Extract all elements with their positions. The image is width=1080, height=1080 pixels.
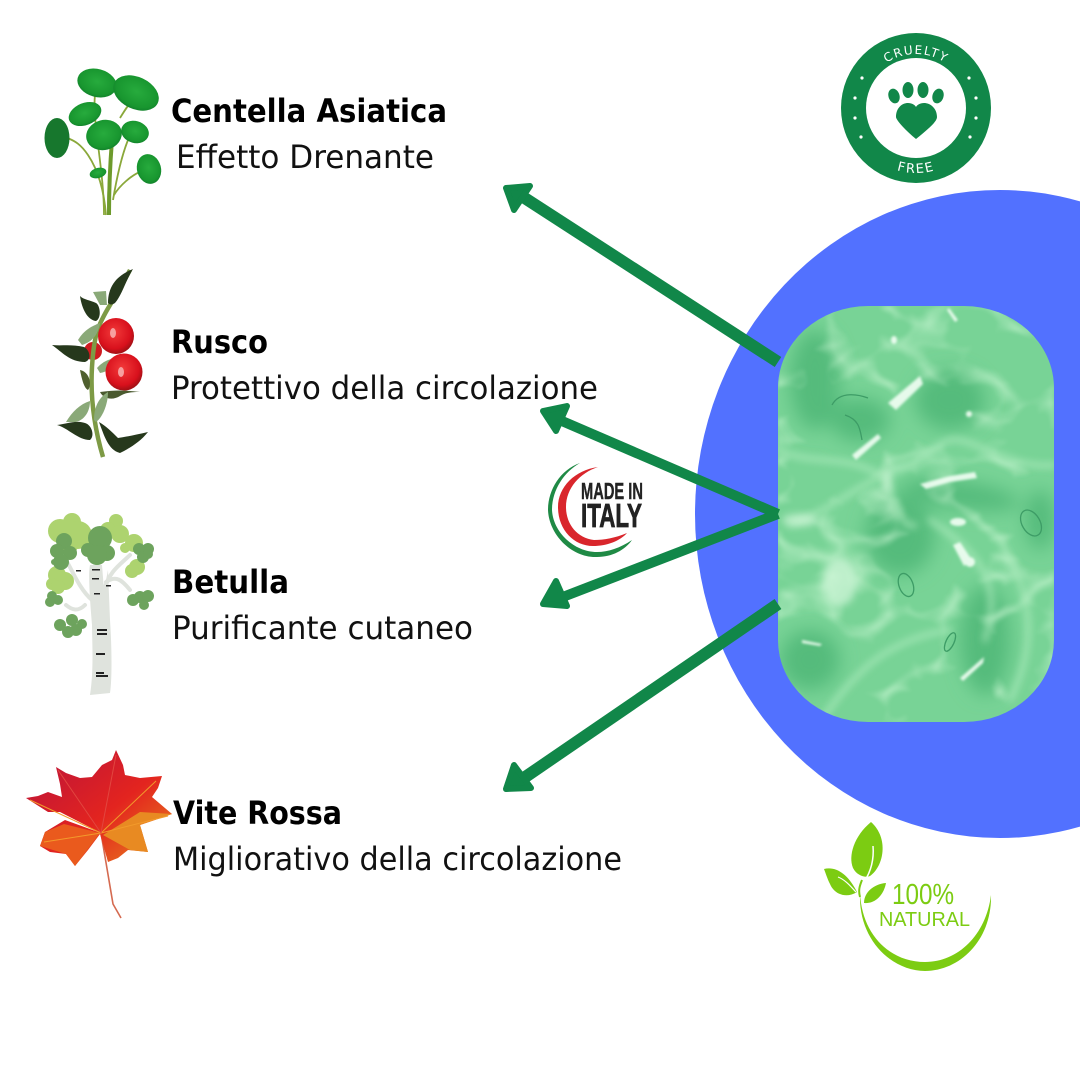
text: Centella Asiatica: [171, 92, 447, 176]
text: Betulla: [172, 563, 473, 647]
icon: red vine leaf: [26, 750, 172, 918]
badge: made in italy: MADE IN: [581, 478, 643, 504]
badge: made in italy: [548, 463, 643, 557]
arrow: to Centella Asiatica: [506, 186, 778, 362]
gel swatch: [778, 306, 1055, 722]
text: Betulla: Betulla: [172, 563, 289, 601]
badge: cruelty free: [841, 33, 991, 183]
badge: 100% natural: 100%: [892, 879, 954, 911]
badge: 100% natural: NATURAL: [879, 909, 970, 931]
badge: 100% natural: [824, 822, 991, 971]
text: Rusco: Rusco: [171, 323, 268, 361]
badge: cruelty free: FREE: [898, 161, 933, 173]
text: Rusco: Protettivo della circolazione: [171, 369, 598, 407]
badge: made in italy: ITALY: [581, 497, 642, 534]
arrow: to Vite Rossa: [506, 604, 778, 789]
arrow: to Rusco: [543, 406, 778, 514]
text: Vite Rossa: Migliorativo della circolazione: [173, 840, 622, 878]
text: Centella Asiatica: Centella Asiatica: [171, 92, 447, 130]
badge: cruelty free: CRUELTY: [884, 45, 949, 61]
arrow: to Betulla: [543, 514, 778, 606]
icon: birch tree: [45, 513, 154, 695]
text: Betulla: Purificante cutaneo: [172, 609, 473, 647]
text: Centella Asiatica: Effetto Drenante: [176, 138, 434, 176]
text: Rusco: [171, 323, 598, 407]
icon: rusco sprig: [52, 269, 148, 457]
text: Vite Rossa: Vite Rossa: [173, 794, 342, 832]
icon: centella plant: [44, 64, 165, 215]
text: Vite Rossa: [173, 794, 622, 878]
blue circle: [695, 190, 1080, 838]
